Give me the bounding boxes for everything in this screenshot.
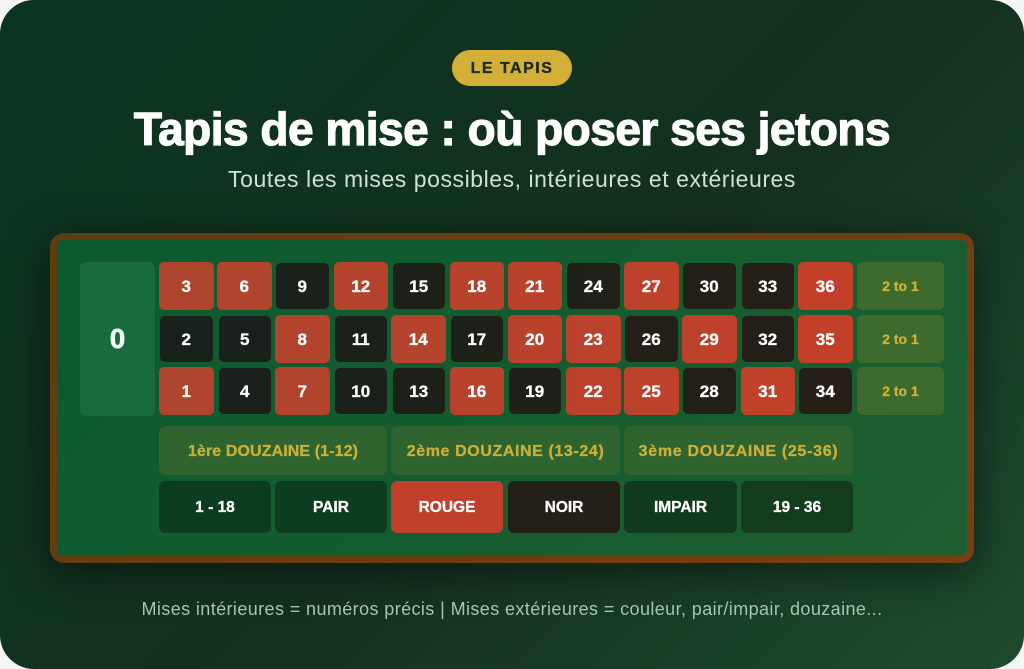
number cells: 25 [642, 382, 661, 400]
number cells: 26 [642, 330, 661, 348]
number cells: 31 [758, 382, 777, 400]
dozen bets: 3ème DOUZAINE (25-36) [639, 442, 838, 460]
dozen bets: 1ère DOUZAINE (1-12) [188, 442, 358, 460]
number cells: 7 [298, 382, 307, 400]
dozen bets [159, 426, 853, 475]
number cells: 2 [182, 330, 191, 348]
number cells: 1 [182, 382, 191, 400]
number cells: 33 [758, 276, 777, 296]
number cells: 8 [298, 330, 307, 348]
number cells: 9 [298, 276, 307, 296]
zero cell: 0 [110, 323, 125, 354]
number cells: 20 [525, 330, 544, 348]
number cells: 27 [642, 276, 661, 296]
number cells: 30 [700, 276, 719, 296]
number cells: 34 [816, 382, 835, 400]
number cells: 15 [409, 276, 428, 296]
dozen bets: 2ème DOUZAINE (13-24) [407, 442, 604, 460]
number cells: 13 [409, 382, 428, 400]
outside bets [159, 481, 853, 533]
subtitle: Toutes les mises possibles, intérieures et extérieures [228, 166, 796, 192]
2 to 1 column bets [857, 262, 944, 415]
number cells: 16 [467, 382, 486, 400]
number cells: 6 [240, 276, 249, 296]
number cells: 19 [525, 382, 544, 400]
2 to 1 column bets: 2 to 1 [882, 278, 919, 294]
panel: roulette board [50, 233, 974, 563]
number cells: 18 [467, 276, 486, 296]
number cells: 32 [758, 330, 777, 348]
number cells: 11 [352, 330, 370, 348]
outside bets: PAIR [313, 498, 349, 516]
zero cell [80, 262, 155, 416]
2 to 1 column bets: 2 to 1 [882, 331, 919, 347]
2 to 1 column bets: 2 to 1 [882, 383, 919, 399]
number cells: 22 [584, 382, 603, 400]
number cells: 23 [584, 330, 603, 348]
outside bets: NOIR [545, 498, 583, 516]
number cells: 28 [700, 382, 719, 400]
badge: LE TAPIS [452, 50, 572, 86]
footer note: Mises intérieures = numéros précis | Mises extérieures = couleur, pair/impair, douzaine... [142, 599, 882, 619]
number cells: 10 [351, 382, 370, 400]
outside bets: 19 - 36 [773, 498, 821, 516]
number cells: 12 [351, 276, 370, 296]
outside bets: 1 - 18 [195, 498, 235, 516]
number cells: 24 [584, 276, 603, 296]
number cells: 14 [409, 330, 428, 348]
number cells: 5 [240, 330, 249, 348]
number cells: 4 [240, 382, 249, 400]
number cells: 3 [182, 276, 191, 296]
number cells: 36 [816, 276, 835, 296]
number cells [159, 262, 853, 415]
number cells: 35 [816, 330, 835, 348]
number cells: 21 [525, 276, 544, 296]
number cells: 17 [467, 330, 486, 348]
betting grid [80, 262, 944, 533]
title: Tapis de mise : où poser ses jetons [134, 103, 890, 155]
outside bets: IMPAIR [654, 498, 707, 516]
badge: LE TAPIS: LE TAPIS [471, 60, 553, 77]
outside bets: ROUGE [419, 498, 475, 516]
number cells: 29 [700, 330, 719, 348]
